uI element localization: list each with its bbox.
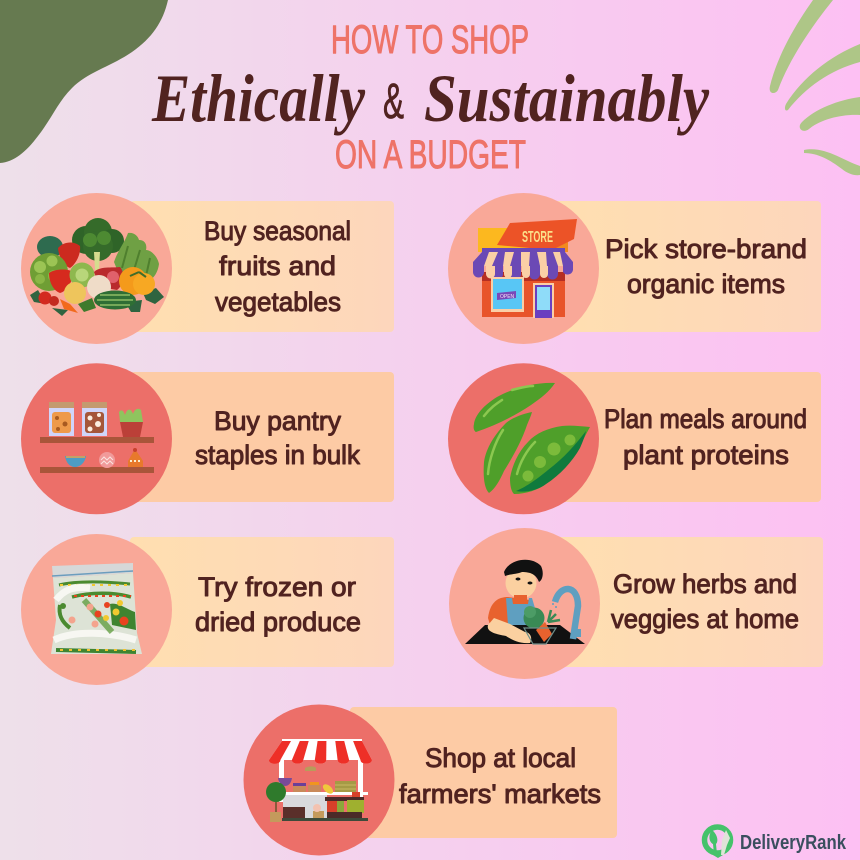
text: pick store-brand: Pick store-brand [605,234,807,264]
circle [21,534,172,685]
circle [448,193,599,344]
card [555,372,821,502]
card [555,201,821,332]
text: fruits and: fruits and [219,251,336,281]
text: buy seasonal: Buy seasonal [204,216,351,246]
heading: how to shop: HOW TO SHOP [331,18,529,62]
icon: store: OPEN [500,294,515,300]
heading: ethically: Ethically [151,60,366,136]
icon: pea pods [474,383,590,494]
text: vegetables: vegetables [215,287,341,317]
icon: vegetables [30,218,164,316]
text: veggies at home: veggies at home [611,604,799,634]
icon: market stall [266,739,372,822]
icon: green ring with fork and spoon [704,827,730,858]
card [130,372,394,502]
panel: store brand [448,193,821,344]
card [130,537,394,667]
grass leaves decoration [770,0,860,175]
card [350,707,617,838]
text: farmers' markets: farmers' markets [399,779,601,809]
text: plant proteins: plant proteins [623,440,789,470]
text: organic items: organic items [627,269,785,299]
card [555,537,823,667]
title [151,18,710,177]
text: plan meals around: Plan meals around [604,404,807,434]
text: buy pantry: Buy pantry [214,406,341,436]
text: staples in bulk: staples in bulk [195,440,360,470]
heading: sustainably: Sustainably [424,60,710,136]
circle [448,363,599,514]
text: shop at local: Shop at local [425,743,576,773]
heading: on a budget: ON A BUDGET [335,133,526,177]
panel: grow at home [449,528,823,679]
icon: pantry shelves [40,402,154,473]
circle [244,704,394,856]
card [130,201,394,332]
panel: plant proteins [448,363,821,514]
text: dried produce: dried produce [195,607,361,637]
icon: store [473,219,577,318]
circle [449,528,600,679]
panel: farmers markets [244,704,617,856]
heading: ampersand: & [383,73,404,129]
icon: store: STORE [522,229,553,246]
panel: frozen produce [21,534,394,685]
icon: frozen vegetable bag [51,563,142,654]
green corner blob [0,0,168,163]
logo: DeliveryRank [704,827,847,858]
panel: seasonal produce [21,193,394,344]
panel: pantry staples [21,363,394,514]
circle [21,363,172,514]
icon: person washing vegetables [465,560,585,644]
text: try frozen or: Try frozen or [198,572,356,602]
circle [21,193,172,344]
text: grow herbs and: Grow herbs and [613,569,797,599]
